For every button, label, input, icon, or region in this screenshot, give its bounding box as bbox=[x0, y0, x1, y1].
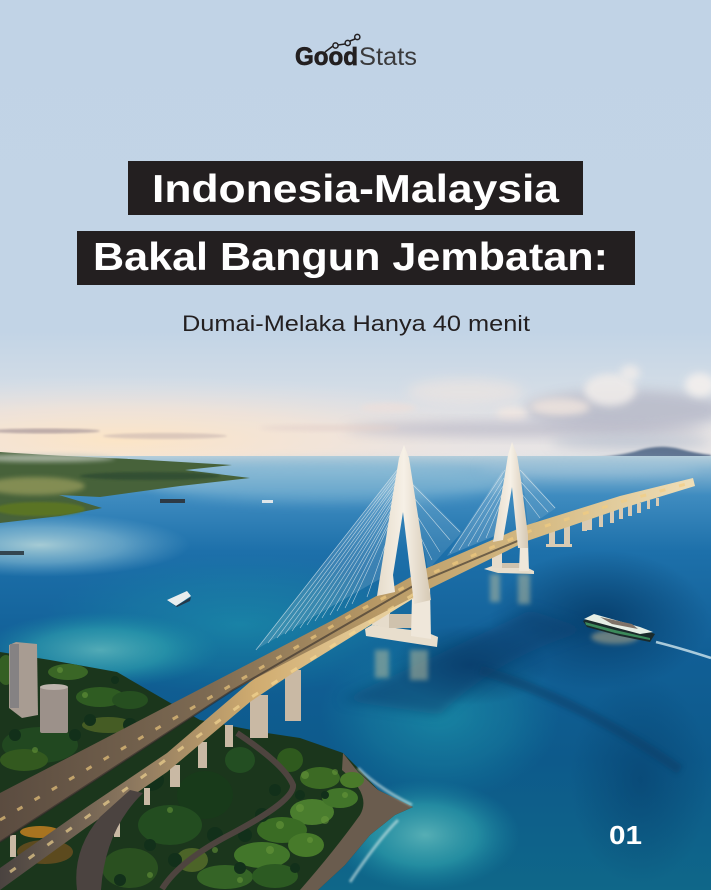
clouds on the horizon bbox=[0, 365, 711, 449]
bridge road deck bbox=[0, 478, 695, 890]
bridge piers bbox=[10, 498, 659, 857]
logo wordmark bold: Good bbox=[295, 43, 358, 71]
shoreline foam bbox=[350, 768, 412, 882]
tower 1 lower pedestal bbox=[365, 586, 438, 647]
logo wordmark light: Stats bbox=[359, 43, 417, 71]
foreground land with trees bbox=[0, 652, 413, 890]
small coastal road bbox=[162, 733, 293, 889]
curved ramp bbox=[76, 790, 143, 890]
subtitle: Dumai-Melaka Hanya 40 menit bbox=[182, 311, 530, 336]
distant ships on the left bbox=[0, 499, 273, 607]
road lights bbox=[0, 483, 690, 820]
upper carriageway bbox=[0, 478, 695, 842]
tower reflections bbox=[375, 574, 530, 680]
sea bbox=[0, 456, 711, 890]
tower 2 lower pedestal bbox=[484, 542, 534, 574]
title line 1: Indonesia-Malaysia bbox=[152, 168, 559, 211]
page number: 01 bbox=[609, 820, 642, 850]
lower carriageway bbox=[0, 578, 427, 890]
title line 2 bbox=[77, 231, 635, 285]
title line 2: Bakal Bangun Jembatan: bbox=[93, 236, 608, 279]
centre divider bbox=[0, 537, 527, 842]
mountain and distant city on the right bbox=[452, 447, 711, 482]
ship bbox=[583, 614, 711, 658]
left coastline land bbox=[0, 452, 250, 523]
tower 1 upper legs bbox=[377, 445, 431, 604]
towers on the shore bbox=[9, 642, 68, 733]
background: pale blue sky bbox=[0, 0, 711, 505]
cable fans bbox=[255, 462, 556, 650]
title line 1 bbox=[128, 161, 583, 215]
logo: GoodStats bbox=[295, 34, 417, 71]
tower 2 upper legs bbox=[493, 442, 528, 548]
logo chain mark bbox=[325, 34, 360, 52]
